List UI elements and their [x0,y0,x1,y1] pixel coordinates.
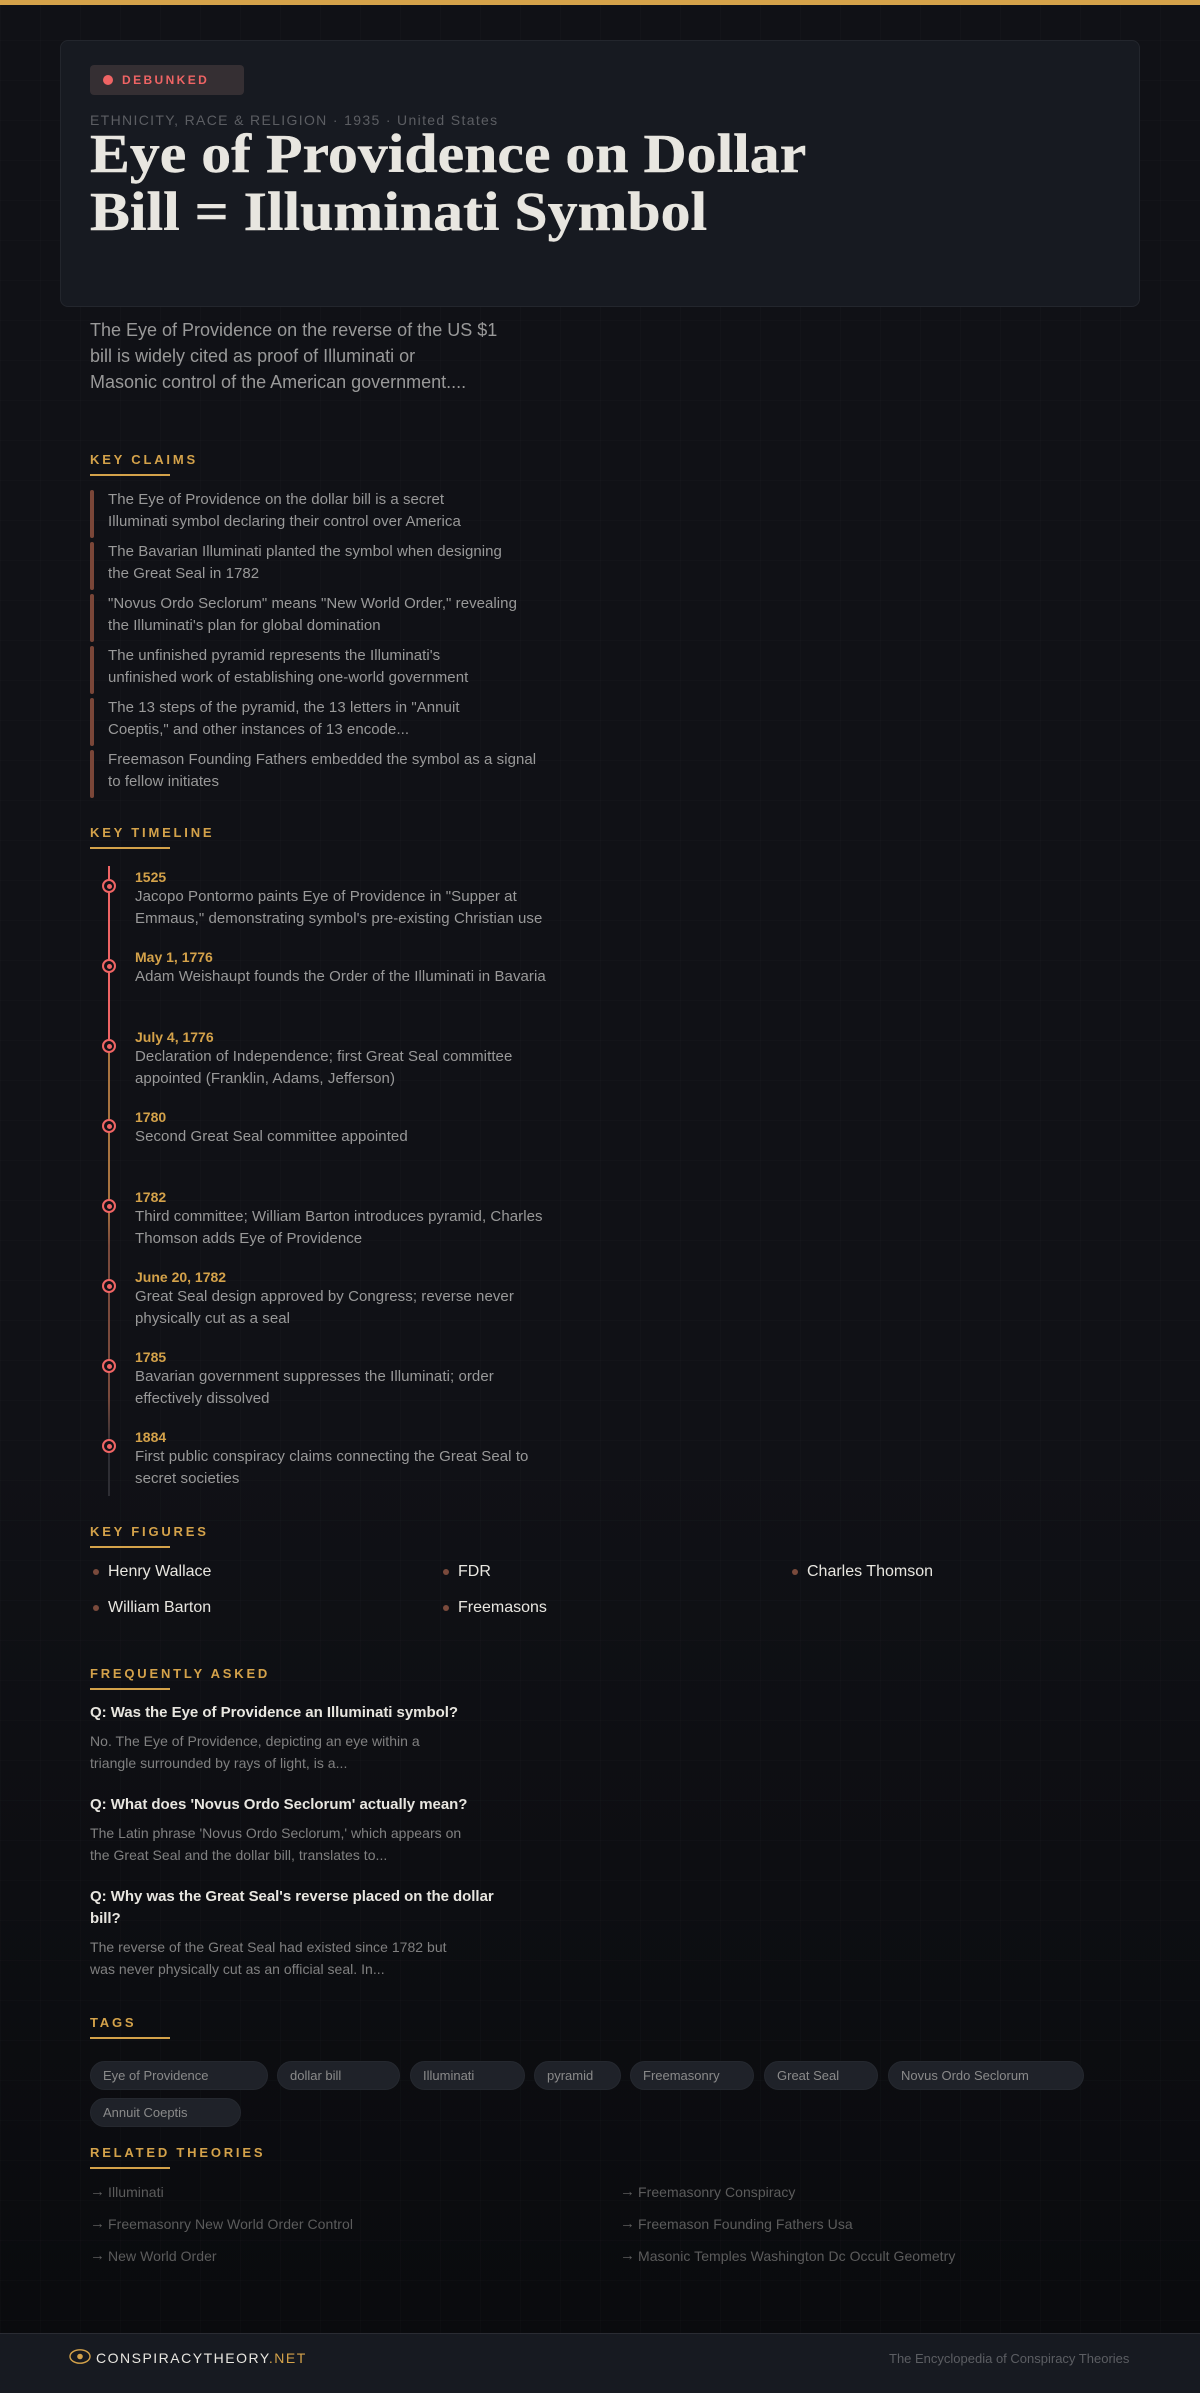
related link: Freemasonry Conspiracy [638,2184,796,2200]
event 1525: 1525 [135,869,166,885]
event June 20, 1782: Great Seal design approved by Congress; reverse never [135,1288,514,1305]
event 1525: Emmaus," demonstrating symbol's pre-existing Christian use [135,910,542,927]
tag: Eye of Providence [103,2068,209,2083]
summary text: bill is widely cited as proof of Illuminati or [90,346,415,366]
status badge: debunked [90,65,244,95]
event July 4, 1776: Declaration of Independence; first Great Seal committee [135,1048,512,1065]
heading: key figures: KEY FIGURES [90,1524,209,1539]
tag: dollar bill [290,2068,341,2083]
answer 2 [90,1825,461,1863]
badge label: DEBUNKED [122,73,209,87]
claim 1: The Eye of Providence on the dollar bill is a secret [108,491,444,508]
event July 4, 1776 [102,1029,512,1087]
tag [90,2061,268,2090]
badge dot [103,75,113,85]
footer tagline: The Encyclopedia of Conspiracy Theories [889,2351,1129,2366]
heading: key timeline: KEY TIMELINE [90,825,214,840]
heading: frequently asked: FREQUENTLY ASKED [90,1666,270,1681]
answer 2: The Latin phrase 'Novus Ordo Seclorum,' which appears on [90,1825,461,1841]
event 1782: Thomson adds Eye of Providence [135,1230,362,1247]
tag: Freemasonry [643,2068,720,2083]
figure: Freemasons: Freemasons [458,1599,547,1616]
event 1525: Jacopo Pontormo paints Eye of Providence in "Supper at [135,888,517,905]
related link: Illuminati [108,2184,164,2200]
footer logo text: CONSPIRACYTHEORY.NET [96,2350,307,2366]
panel: key claims list [90,490,536,798]
related link: New World Order [108,2248,217,2264]
related link: Freemason Founding Fathers Usa [638,2216,853,2232]
claim 6: to fellow initiates [108,773,219,790]
claim 5 [90,698,460,746]
event July 4, 1776: July 4, 1776 [135,1029,214,1045]
tag [764,2061,878,2090]
claim 2: the Great Seal in 1782 [108,565,259,582]
event 1525 [102,869,542,927]
tag: Great Seal [777,2068,839,2083]
question 1: Q: Was the Eye of Providence an Illuminati symbol? [90,1704,458,1721]
related link: → [620,2215,635,2232]
related link: → [620,2183,635,2200]
claim 6 [90,750,536,798]
event May 1, 1776: May 1, 1776 [135,949,213,965]
panel: related theories [90,2183,956,2264]
summary text [90,320,497,392]
title: Eye of Providence on Dollar [90,123,806,184]
title: Bill = Illuminati Symbol [90,181,707,242]
tag: Illuminati [423,2068,474,2083]
event June 20, 1782 [102,1269,514,1327]
claim 3: the Illuminati's plan for global domination [108,617,381,634]
summary text: The Eye of Providence on the reverse of the US $1 [90,320,497,340]
heading: tags: TAGS [90,2015,136,2030]
answer 1: triangle surrounded by rays of light, is a... [90,1755,347,1771]
tag [277,2061,400,2090]
claim 4 [90,646,468,694]
claim 3 [90,594,517,642]
footer [0,2333,1200,2393]
event 1785 [102,1349,494,1407]
event June 20, 1782: physically cut as a seal [135,1310,290,1327]
question 3 [90,1888,494,1927]
event 1785: 1785 [135,1349,166,1365]
answer 1: No. The Eye of Providence, depicting an eye within a [90,1733,420,1749]
title [90,123,806,242]
figure: Henry Wallace: Henry Wallace [108,1563,211,1580]
top accent bar [0,0,1200,5]
timeline spine [108,866,110,1496]
figure: FDR [443,1563,491,1580]
event 1884: 1884 [135,1429,166,1445]
related link: → [90,2183,105,2200]
panel: timeline [102,866,546,1496]
panel: tags [90,2061,1084,2127]
category meta line: ETHNICITY, RACE & RELIGION · 1935 · United States [90,112,499,128]
event July 4, 1776: appointed (Franklin, Adams, Jefferson) [135,1070,395,1087]
tag [630,2061,754,2090]
answer 1 [90,1733,420,1771]
event 1782: Third committee; William Barton introduces pyramid, Charles [135,1208,543,1225]
event 1884: secret societies [135,1470,240,1487]
event May 1, 1776: Adam Weishaupt founds the Order of the Illuminati in Bavaria [135,968,546,985]
event 1785: Bavarian government suppresses the Illuminati; order [135,1368,494,1385]
tag: pyramid [547,2068,593,2083]
event June 20, 1782: June 20, 1782 [135,1269,226,1285]
event 1780: 1780 [135,1109,166,1125]
question 2: Q: What does 'Novus Ordo Seclorum' actually mean? [90,1796,467,1813]
tag [90,2098,241,2127]
related link: Masonic Temples Washington Dc Occult Geometry [638,2248,955,2264]
related link: → [90,2247,105,2264]
claim 5: Coeptis," and other instances of 13 encode... [108,721,409,738]
tag [534,2061,621,2090]
claim 3: "Novus Ordo Seclorum" means "New World Order," revealing [108,595,517,612]
event 1884: First public conspiracy claims connecting the Great Seal to [135,1448,528,1465]
claim 6: Freemason Founding Fathers embedded the symbol as a signal [108,751,536,768]
tag: Annuit Coeptis [103,2105,188,2120]
figure: William Barton: William Barton [108,1599,211,1616]
event 1780 [102,1109,408,1145]
answer 3: The reverse of the Great Seal had existed since 1782 but [90,1939,447,1955]
claim 1 [90,490,461,538]
claim 4: The unfinished pyramid represents the Illuminati's [108,647,440,664]
event 1884 [102,1429,528,1487]
figure: Charles Thomson: Charles Thomson [807,1563,933,1580]
summary text: Masonic control of the American government.... [90,372,466,392]
tag [410,2061,525,2090]
question 3: bill? [90,1910,121,1927]
related link [90,2246,217,2267]
heading: related theories: RELATED THEORIES [90,2145,265,2160]
tag [888,2061,1084,2090]
related link: Freemasonry New World Order Control [108,2216,353,2232]
event 1782: 1782 [135,1189,166,1205]
event 1782 [102,1189,543,1247]
claim 1: Illuminati symbol declaring their control over America [108,513,461,530]
event 1780: Second Great Seal committee appointed [135,1128,408,1145]
related link: → [620,2247,635,2264]
heading: key claims: KEY CLAIMS [90,452,198,467]
panel: key figures [93,1563,933,1616]
claim 2 [90,542,502,590]
claim 5: The 13 steps of the pyramid, the 13 letters in "Annuit [108,699,460,716]
claim 2: The Bavarian Illuminati planted the symbol when designing [108,543,502,560]
answer 3: was never physically cut as an official seal. In... [90,1961,385,1977]
question 3: Q: Why was the Great Seal's reverse placed on the dollar [90,1888,494,1905]
answer 3 [90,1939,447,1977]
tag: Novus Ordo Seclorum [901,2068,1029,2083]
panel: hero header [60,40,1140,307]
answer 2: the Great Seal and the dollar bill, translates to... [90,1847,387,1863]
event 1785: effectively dissolved [135,1390,270,1407]
claim 4: unfinished work of establishing one-world government [108,669,468,686]
related link: → [90,2215,105,2232]
event May 1, 1776 [102,949,546,985]
figure: FDR: FDR [458,1563,491,1580]
icon: eye logo [69,2348,91,2365]
